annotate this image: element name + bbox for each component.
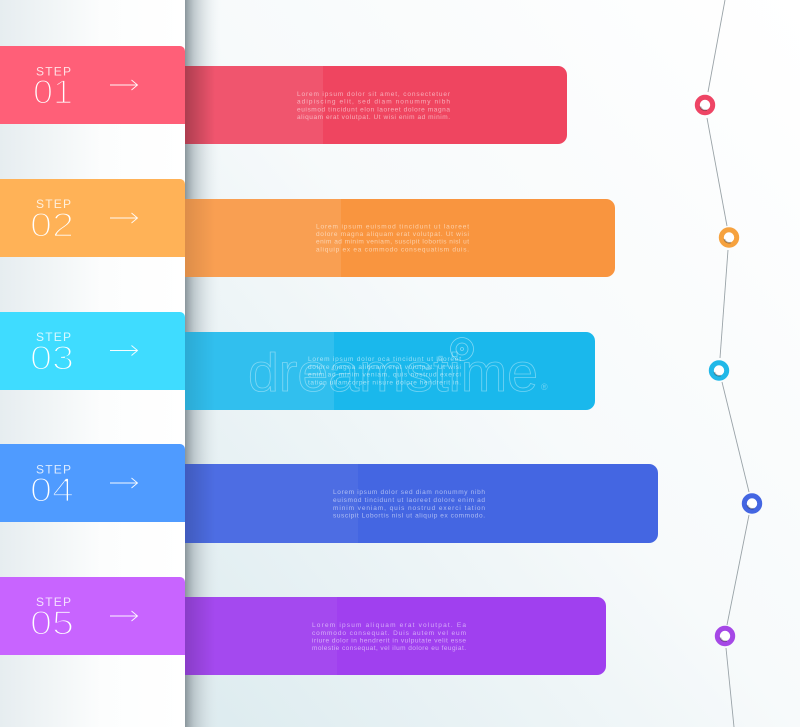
bar 5 text: commodo consequat. Duis autem vel eum bbox=[312, 630, 466, 637]
step 3 label: STEP bbox=[36, 330, 72, 344]
node 2 bbox=[721, 230, 737, 245]
step 1 number: 01 bbox=[33, 74, 73, 112]
bar 3 text: tation ullamcorper nisure dolore hendrerit in. bbox=[308, 380, 461, 386]
bar 1 bbox=[185, 66, 567, 144]
background bbox=[185, 0, 800, 727]
bar 2 text: Lorem ipsum euismod tincidunt ut laoreet bbox=[316, 224, 469, 230]
bar 1 text: euismod tincidunt elon laoreet dolore magna bbox=[297, 106, 450, 114]
bar 2 bbox=[185, 199, 615, 277]
step 1 tab bbox=[0, 46, 185, 124]
step 2 number: 02 bbox=[30, 206, 74, 244]
step 3 tab bbox=[0, 312, 185, 390]
bar 2 text: enim ad minim veniam, suscipit lobortis nisl ut bbox=[316, 238, 469, 246]
bar 1 text: Lorem ipsum dolor sit amet, consectetuer bbox=[297, 91, 451, 98]
bar 1 text: aliquam erat volutpat. Ut wisi enim ad minim. bbox=[297, 114, 450, 121]
bar 3 text bbox=[308, 356, 461, 386]
step 4 arrow bbox=[110, 478, 138, 488]
step 5 tab bbox=[0, 577, 185, 655]
bar 4 text: suscipit Lobortis nisl ut aliquip ex commodo. bbox=[333, 512, 485, 520]
node 5 bbox=[717, 628, 733, 644]
bar 2 text bbox=[316, 224, 469, 254]
step 4 number: 04 bbox=[30, 472, 74, 510]
bar 4 text: minim veniam, quis nostrud exerci tation bbox=[333, 505, 485, 512]
step 4 tab bbox=[0, 444, 185, 522]
step 2 label: STEP bbox=[36, 197, 72, 211]
bar 5 bbox=[185, 597, 606, 675]
watermark: dreamstime bbox=[248, 343, 538, 403]
bar 1 text: adipiscing elit, sed diam nonummy nibh bbox=[297, 98, 450, 106]
bar 4 text bbox=[333, 489, 485, 520]
watermark spiral bbox=[450, 338, 474, 360]
bar 5 text: Lorem ipsum aliquam erat volutpat. Ea bbox=[312, 622, 466, 629]
left panel bbox=[0, 0, 184, 727]
bar 2 text: aliquip ex ea commodo consequatism duis. bbox=[316, 246, 469, 254]
bar 3 text: dolore magna aliquam erat volutpat. Ut wisi bbox=[308, 364, 461, 371]
step 1 label: STEP bbox=[36, 64, 72, 78]
node 4 bbox=[744, 496, 760, 511]
bar 4 text: euismod tincidunt ut laoreet dolore enim ad bbox=[333, 497, 485, 504]
bar 4 bbox=[185, 464, 658, 543]
bar 4 text: Lorem ipsum dolor sed diam nonummy nibh bbox=[333, 489, 485, 496]
watermark registered mark: ® bbox=[541, 382, 548, 392]
step 4 label: STEP bbox=[36, 462, 72, 476]
bar 5 text: molestie consequat, vel ilum dolore eu feugiat. bbox=[312, 645, 466, 652]
bar 3 text: Lorem ipsum dolor oca tincidunt ut laoreet bbox=[308, 356, 461, 363]
bar 3 bbox=[185, 332, 595, 410]
bar 2 text: dolore magna aliquam erat volutpat. Ut wisi bbox=[316, 231, 469, 238]
step 1 arrow bbox=[110, 80, 138, 90]
step 3 number: 03 bbox=[30, 340, 74, 378]
bar 3 text: enim ad minim veniam, quis nostrud exerci bbox=[308, 372, 461, 378]
node 3 bbox=[711, 363, 727, 378]
step 3 arrow bbox=[110, 346, 138, 356]
timeline line bbox=[707, 0, 749, 727]
step 2 arrow bbox=[110, 213, 138, 223]
bar 1 text bbox=[297, 91, 451, 121]
step 5 arrow bbox=[110, 611, 138, 621]
bar 5 text bbox=[312, 622, 466, 652]
step 5 number: 05 bbox=[30, 604, 74, 642]
node 1 bbox=[697, 97, 713, 113]
step 5 label: STEP bbox=[36, 595, 72, 609]
bar 5 text: iriure dolor in hendrerit in vulputate velit esse bbox=[312, 638, 466, 644]
step 2 tab bbox=[0, 179, 185, 257]
fold shadow bbox=[185, 0, 221, 727]
